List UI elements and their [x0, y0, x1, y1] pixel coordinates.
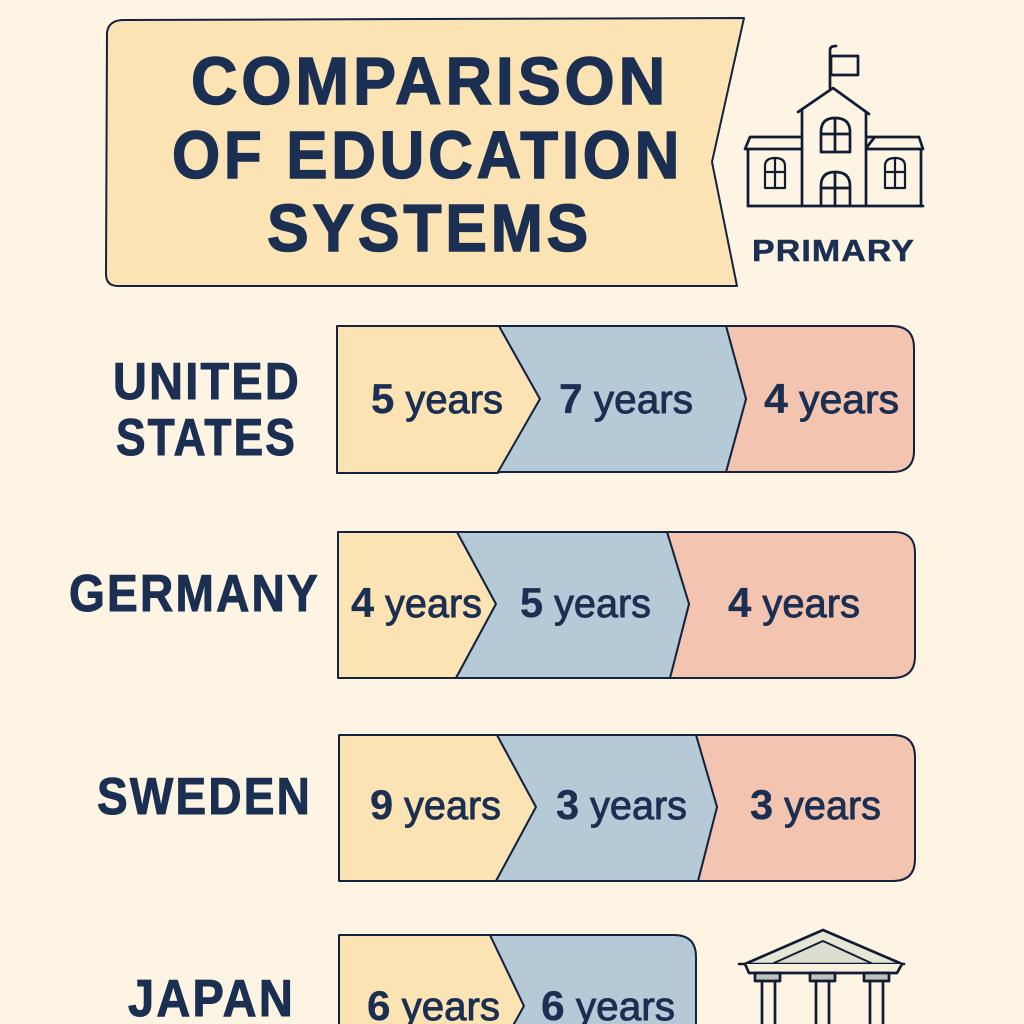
segment: 4 years: 4 years — [351, 579, 482, 626]
title banner: COMPARISON — [191, 44, 669, 119]
segment: 6 years — [490, 935, 696, 1024]
title banner: OF EDUCATION — [172, 118, 683, 193]
label: primary: PRIMARY — [752, 233, 915, 268]
icon: university building — [739, 930, 904, 1024]
icon: primary school building — [745, 46, 923, 206]
segment: 6 years — [339, 935, 524, 1024]
segment: 3 years — [696, 735, 915, 881]
segment: 9 years: 9 years — [370, 781, 501, 828]
country label: Sweden: SWEDEN — [97, 768, 312, 826]
title banner: SYSTEMS — [267, 191, 592, 266]
title banner — [106, 18, 744, 286]
country label: United States: UNITED — [113, 353, 301, 411]
segment: 5 years — [337, 326, 540, 473]
row: Japan — [128, 935, 696, 1024]
segment: 4 years: 4 years — [764, 375, 899, 422]
segment: 4 years — [338, 532, 496, 678]
segment: 4 years — [667, 532, 915, 678]
row: United States — [113, 326, 914, 473]
row: Germany — [69, 532, 915, 678]
segment: 4 years — [726, 326, 914, 472]
segment: 3 years — [496, 735, 717, 881]
segment: 5 years: 5 years — [371, 375, 503, 422]
country label: United States — [113, 353, 301, 467]
segment: 7 years — [498, 326, 746, 472]
segment: 5 years: 5 years — [520, 579, 651, 626]
segment: 3 years: 3 years — [556, 781, 687, 828]
segment: 5 years — [456, 532, 689, 678]
row: Sweden — [97, 735, 915, 881]
segment: 7 years: 7 years — [559, 375, 693, 422]
segment: 4 years: 4 years — [728, 579, 860, 626]
country label: Germany: GERMANY — [69, 565, 320, 623]
segment: 9 years — [339, 735, 536, 881]
country label: United States: STATES — [116, 409, 297, 467]
segment: 3 years: 3 years — [750, 781, 881, 828]
